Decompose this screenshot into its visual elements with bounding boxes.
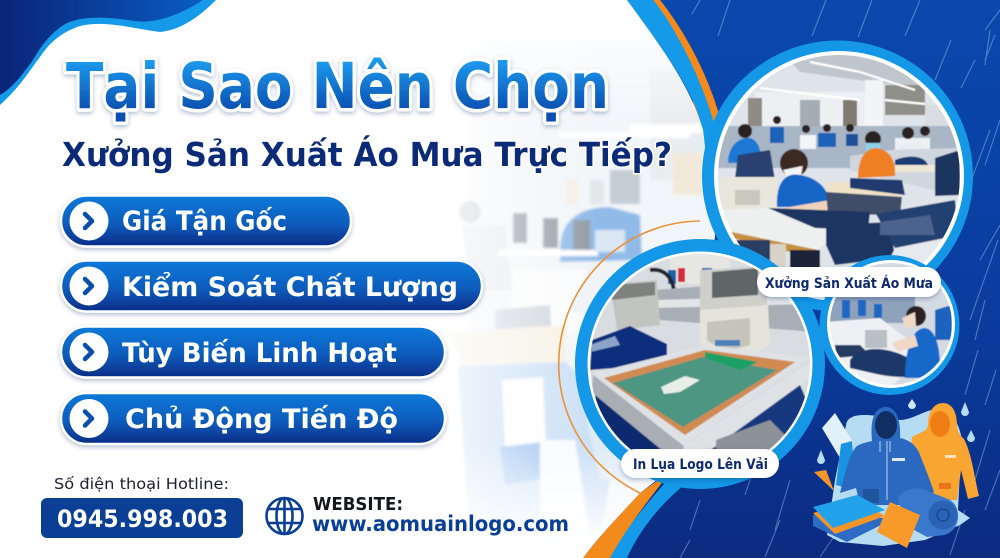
button: Chủ Động Tiến Độ	[61, 393, 445, 444]
faded factory photo background	[454, 41, 715, 526]
splash backdrop	[827, 409, 970, 546]
subtitle: Xưởng Sản Xuất Áo Mưa Trực Tiếp?	[62, 134, 672, 174]
blue raincoat	[840, 407, 934, 505]
orange hood inner	[930, 411, 950, 437]
caption: Xưởng Sản Xuất Áo Mưa: Xưởng Sản Xuất Áo Mưa	[765, 275, 933, 292]
photo circle: sewing workshop	[702, 40, 973, 312]
button: Kiểm Soát Chất Lượng	[61, 260, 482, 312]
hotline label: Số điện thoại Hotline:	[54, 475, 229, 493]
button: Chủ Động Tiến Độ: Chủ Động Tiến Độ	[125, 404, 398, 435]
website block: www.aomuainlogo.com	[312, 512, 569, 536]
jacket zipper and tag	[880, 441, 890, 500]
curved orange band, bottom	[583, 472, 670, 558]
orange folded cloth	[877, 502, 920, 548]
button: Kiểm Soát Chất Lượng: Kiểm Soát Chất Lượng	[122, 270, 458, 303]
button: Tùy Biến Linh Hoạt	[61, 326, 445, 378]
button: Tùy Biến Linh Hoạt: Tùy Biến Linh Hoạt	[122, 338, 397, 369]
rolled light fabric	[822, 413, 853, 488]
photo circle: screen printing machine	[575, 239, 825, 489]
caption: Xưởng Sản Xuất Áo Mưa	[757, 267, 941, 297]
button: Giá Tận Gốc: Giá Tận Gốc	[122, 206, 287, 237]
orange raincoat	[908, 403, 979, 500]
curved orange band, top	[653, 0, 722, 140]
website block	[312, 494, 569, 536]
icon: globe	[266, 498, 302, 534]
thin orange ring	[559, 221, 700, 493]
blue fabric strip	[836, 441, 854, 488]
rain drops	[908, 399, 916, 409]
button: Giá Tận Gốc	[61, 196, 351, 246]
hotline number box: 0945.998.003	[57, 505, 228, 533]
photo circle: small sewing worker	[820, 255, 960, 395]
folded fabric stack	[813, 515, 885, 542]
hotline number box	[41, 498, 243, 538]
top-left wave corner	[0, 0, 216, 105]
caption: In Lụa Logo Lên Vải	[621, 449, 779, 478]
illustration: raincoats and fabric	[813, 399, 979, 548]
white content panel	[0, 0, 715, 558]
curved light blue band, top	[627, 0, 716, 200]
orange swatch	[814, 470, 834, 491]
rolled blue fabric	[898, 488, 958, 537]
blue hood inner	[875, 411, 897, 439]
caption: In Lụa Logo Lên Vải: In Lụa Logo Lên Vải	[633, 457, 768, 473]
curved light blue band, bottom	[608, 475, 690, 558]
website block: WEBSITE:	[313, 494, 403, 515]
title: Tại Sao Nên Chọn	[66, 50, 609, 123]
